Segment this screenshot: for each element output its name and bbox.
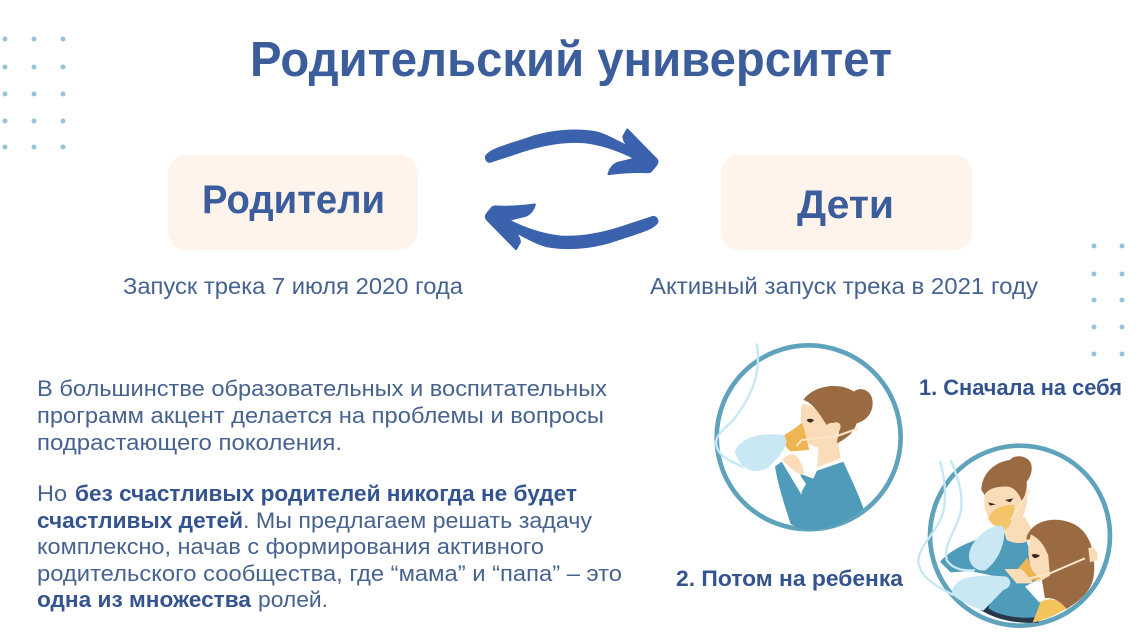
arrow: parents to children — [486, 130, 657, 174]
dot pattern: right — [1092, 244, 1124, 356]
text block: main message: ролей. — [258, 587, 328, 612]
text block: main message: . Мы предлагаем решать задачу — [243, 508, 592, 533]
text block: main message: комплексно, начав с формирования активного — [37, 534, 544, 559]
label: step 1: 1. Сначала на себя — [919, 375, 1122, 400]
dot pattern: top left — [2, 36, 66, 150]
text block: main message: одна из множества — [37, 587, 252, 612]
label: step 2: 2. Потом на ребенка — [676, 566, 904, 591]
text block: main message — [37, 481, 622, 612]
text block: main message: родительского сообщества, где “мама” и “папа” – это — [37, 561, 622, 586]
panel: parents: Родители — [202, 178, 385, 222]
subtitle: parents: Запуск трека 7 июля 2020 года — [123, 273, 463, 299]
text block: main message: без счастливых родителей никогда не будет — [75, 481, 577, 506]
panel: children: Дети — [797, 183, 894, 227]
panel: parents — [168, 155, 418, 250]
illustration: mother and child with oxygen masks — [918, 446, 1110, 626]
title: Родительский университет — [250, 33, 892, 87]
text block: intro: подрастающего поколения. — [37, 430, 342, 455]
text block: main message: счастливых детей — [37, 508, 243, 533]
text block: intro — [37, 376, 607, 455]
subtitle: children: Активный запуск трека в 2021 году — [650, 273, 1039, 299]
arrow: children to parents — [486, 205, 657, 249]
text block: intro: В большинстве образовательных и воспитательных — [37, 376, 607, 401]
text block: main message: Но — [37, 481, 67, 506]
text block: intro: программ акцент делается на проблемы и вопросы — [37, 403, 604, 428]
panel: children — [721, 155, 972, 250]
illustration: woman with oxygen mask — [716, 343, 901, 530]
